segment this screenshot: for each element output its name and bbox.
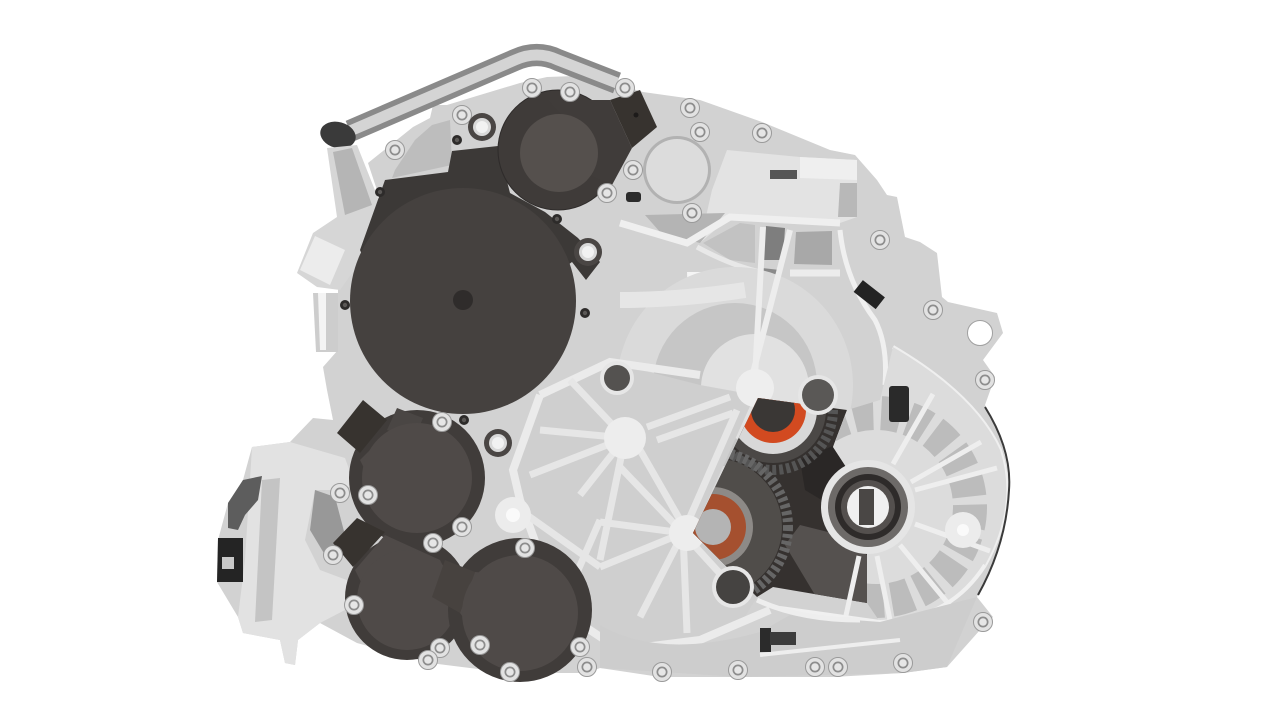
housing silhouette bbox=[217, 76, 1008, 677]
right gear housing bbox=[780, 347, 1009, 622]
pockets under bracket bbox=[620, 217, 840, 296]
upper bracket casting bbox=[645, 150, 857, 243]
main dark cover bbox=[350, 146, 600, 414]
upper gear bbox=[731, 398, 838, 475]
bolts bbox=[324, 78, 994, 682]
black sensors and bolts bbox=[626, 192, 909, 652]
middle left cover bbox=[337, 400, 485, 546]
transmission illustration bbox=[217, 44, 1010, 682]
gear compartment bbox=[693, 398, 867, 603]
plugs bbox=[495, 361, 838, 608]
output bearing bbox=[821, 460, 915, 554]
lower left cover bbox=[333, 518, 469, 660]
lower right cover bbox=[432, 538, 592, 682]
flange hole bbox=[968, 320, 992, 346]
lower gear bbox=[693, 450, 793, 594]
upper solenoid cover bbox=[498, 90, 657, 210]
central gear face bbox=[617, 227, 1006, 565]
lower left actuator module bbox=[217, 442, 360, 665]
lower left star casting bbox=[510, 362, 774, 650]
lower band casting bbox=[600, 597, 977, 677]
knob bbox=[453, 290, 473, 310]
coolant pipe bbox=[317, 55, 617, 152]
silver solenoid cap bbox=[643, 136, 711, 204]
coolant housing left bbox=[297, 120, 452, 352]
